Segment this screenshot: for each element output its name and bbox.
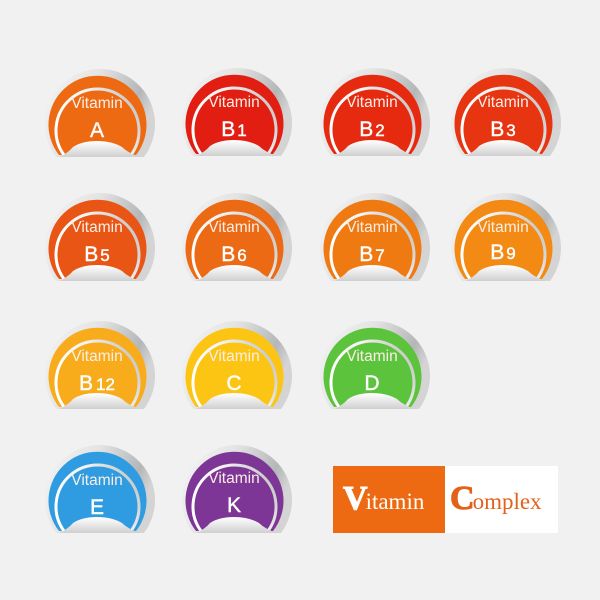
badge: Vitamin K: Vitamin bbox=[208, 470, 260, 487]
badge: Vitamin B5: Vitamin bbox=[71, 219, 123, 236]
badge: Vitamin B12: Vitamin bbox=[71, 348, 123, 365]
badge: Vitamin A: Vitamin bbox=[71, 95, 123, 112]
badge: Vitamin A: A bbox=[90, 119, 104, 142]
badge: Vitamin B3 bbox=[451, 68, 561, 156]
badge: Vitamin K bbox=[182, 445, 292, 533]
badge: Vitamin B6: B6 bbox=[221, 243, 247, 266]
badge: Vitamin B7: B7 bbox=[359, 243, 385, 266]
badge: Vitamin E bbox=[45, 445, 155, 533]
badge: Vitamin B2 bbox=[320, 68, 430, 156]
badge: Vitamin B1: B1 bbox=[221, 118, 247, 141]
badge: Vitamin B9: B9 bbox=[490, 241, 516, 264]
badge: Vitamin B12: B12 bbox=[79, 372, 115, 395]
badge: Vitamin C bbox=[182, 321, 292, 409]
badge: Vitamin D bbox=[320, 321, 430, 409]
badge: Vitamin A bbox=[45, 69, 155, 157]
badge: Vitamin B1 bbox=[182, 68, 292, 156]
badge: Vitamin B3: Vitamin bbox=[477, 94, 529, 111]
badge: Vitamin C: Vitamin bbox=[208, 348, 260, 365]
badge: Vitamin B3: B3 bbox=[490, 118, 516, 141]
badge: Vitamin B2: B2 bbox=[359, 118, 385, 141]
badge: Vitamin E: Vitamin bbox=[71, 472, 123, 489]
logo: Vitamin Complex bbox=[333, 466, 558, 533]
logo: Vitamin Complex: Vitamin bbox=[343, 480, 425, 517]
badge: Vitamin B5: B5 bbox=[84, 243, 110, 266]
badge: Vitamin B2: Vitamin bbox=[346, 94, 398, 111]
badge: Vitamin K: K bbox=[227, 494, 241, 517]
badge: Vitamin B12 bbox=[45, 321, 155, 409]
badge: Vitamin D: Vitamin bbox=[346, 348, 398, 365]
badge: Vitamin B9 bbox=[451, 193, 561, 281]
badge: Vitamin B5 bbox=[45, 193, 155, 281]
logo: Vitamin Complex: Complex bbox=[450, 480, 542, 517]
badge: Vitamin B7: Vitamin bbox=[346, 219, 398, 236]
badge: Vitamin B1: Vitamin bbox=[208, 94, 260, 111]
badge: Vitamin B6: Vitamin bbox=[208, 219, 260, 236]
badge: Vitamin B6 bbox=[182, 193, 292, 281]
badge: Vitamin E: E bbox=[90, 496, 104, 519]
badge: Vitamin B7 bbox=[320, 193, 430, 281]
badge: Vitamin C: C bbox=[226, 372, 242, 395]
badge: Vitamin B9: Vitamin bbox=[477, 219, 529, 236]
badge: Vitamin D: D bbox=[364, 372, 380, 395]
